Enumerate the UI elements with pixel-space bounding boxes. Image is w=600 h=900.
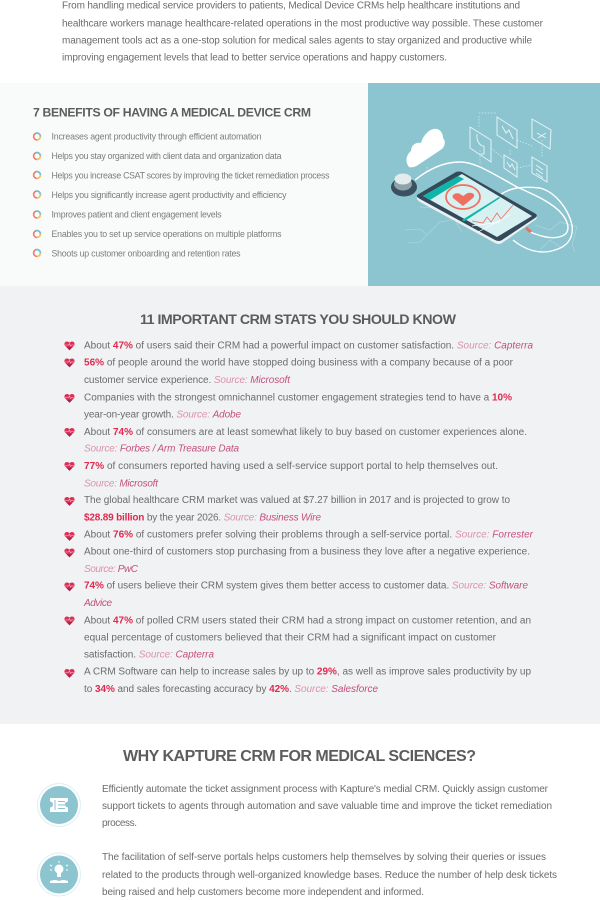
benefits list: Shoots up customer onboarding and retention rates [52,248,241,258]
intro paragraph [62,0,544,64]
stats list: customer service experience. Source: Microsoft [84,375,291,386]
stats list: $28.89 billion by the year 2026. Source: Business Wire [84,512,321,524]
text: ticket automation: Efficiently automate the ticket assignment process with Kapture's medial CRM. Quickly assign customer [102,784,549,795]
stats list: A CRM Software can help to increase sales by up to 29%, as well as improve sales productivity by up [84,666,531,678]
benefits list: Helps you stay organized with client data and organization data [52,151,282,161]
stats list: to 34% and sales forecasting accuracy by 42%. Source: Salesforce [84,684,378,695]
stats list: About 47% of users said their CRM had a powerful impact on customer satisfaction. Source: Capterra [84,340,533,352]
icon: cloud [407,129,445,167]
benefits heading: 7 BENEFITS OF HAVING A MEDICAL DEVICE CRM [33,106,311,120]
intro paragraph: management tools act as a one-stop solution for medical sales agents to stay organized and productive while [62,36,532,46]
intro paragraph: improving engagement levels that lead to better service operations and happy customers. [62,52,447,64]
stats list: Source: Forbes / Arm Treasure Data [84,444,239,454]
text: self-serve portals [102,852,557,898]
text: ticket automation: process. [102,818,137,829]
text: self-serve portals: The facilitation of self-serve portals helps customers help themselves by solving their queries or issues [102,852,546,863]
intro paragraph: From handling medical service providers to patients, Medical Device CRMs help healthcare institutions and [62,0,520,12]
benefits list [34,132,330,258]
stats list: 56% of people around the world have stopped doing business with a company because of a poor [84,358,514,368]
text: ticket automation: support tickets to agents through automation and save valuable time and improve the ticket remediation [102,801,552,812]
stats list [64,340,534,695]
panel: benefits [0,83,368,286]
phone [417,172,537,244]
stats list: Companies with the strongest omnichannel customer engagement strategies tend to have a 10% [84,392,512,404]
illustration: medical phone [368,83,600,286]
stats heading: 11 IMPORTANT CRM STATS YOU SHOULD KNOW [140,312,457,328]
text: self-serve portals: being raised and help customers become more independent and informed. [102,887,424,898]
icon: knowledge bulb [38,853,80,896]
benefits list: Helps you increase CSAT scores by improving the ticket remediation process [52,170,330,180]
intro paragraph: healthcare workers manage healthcare-related operations in the most productive way possible. These customer [62,18,544,30]
text: ticket automation [102,784,552,829]
stats list: Source: Microsoft [84,478,159,490]
stats list: Source: PwC [84,564,139,575]
benefits list: Improves patient and client engagement levels [52,210,222,220]
stats list: Advice [83,598,112,609]
panel: CRM stats [0,286,600,724]
stats list: year-on-year growth. Source: Adobe [84,410,241,420]
icon: ticket [38,784,80,826]
stats list: About 47% of polled CRM users stated their CRM had a strong impact on customer retention, and an [84,616,531,626]
stats list: The global healthcare CRM market was valued at $7.27 billion in 2017 and is projected to grow to [84,495,510,506]
stethoscope wires [415,162,572,252]
benefits list: Helps you significantly increase agent productivity and efficiency [52,190,287,200]
text: self-serve portals: related to the products through well-organized knowledge bases. Reduce the number of help desk tickets [102,870,557,881]
why Kapture heading: WHY KAPTURE CRM FOR MEDICAL SCIENCES? [123,748,476,765]
stats list: About 76% of customers prefer solving their problems through a self-service portal. Source: Forrester [84,530,534,540]
stats list: equal percentage of customers believed that their CRM had a significant impact on customer [84,632,497,644]
stats list: About 74% of consumers are at least somewhat likely to buy based on customer experiences alone. [84,427,527,438]
benefits list: Increases agent productivity through efficient automation [52,132,262,142]
stats list: 77% of consumers reported having used a self-service support portal to help themselves out. [84,461,498,472]
stats list: satisfaction. Source: Capterra [84,650,214,660]
benefits list: Enables you to set up service operations on multiple platforms [52,229,282,239]
stats list: 74% of users believe their CRM system gives them better access to customer data. Source: Software [84,580,528,592]
stats list: About one-third of customers stop purchasing from a business they love after a negative experience. [84,546,530,558]
